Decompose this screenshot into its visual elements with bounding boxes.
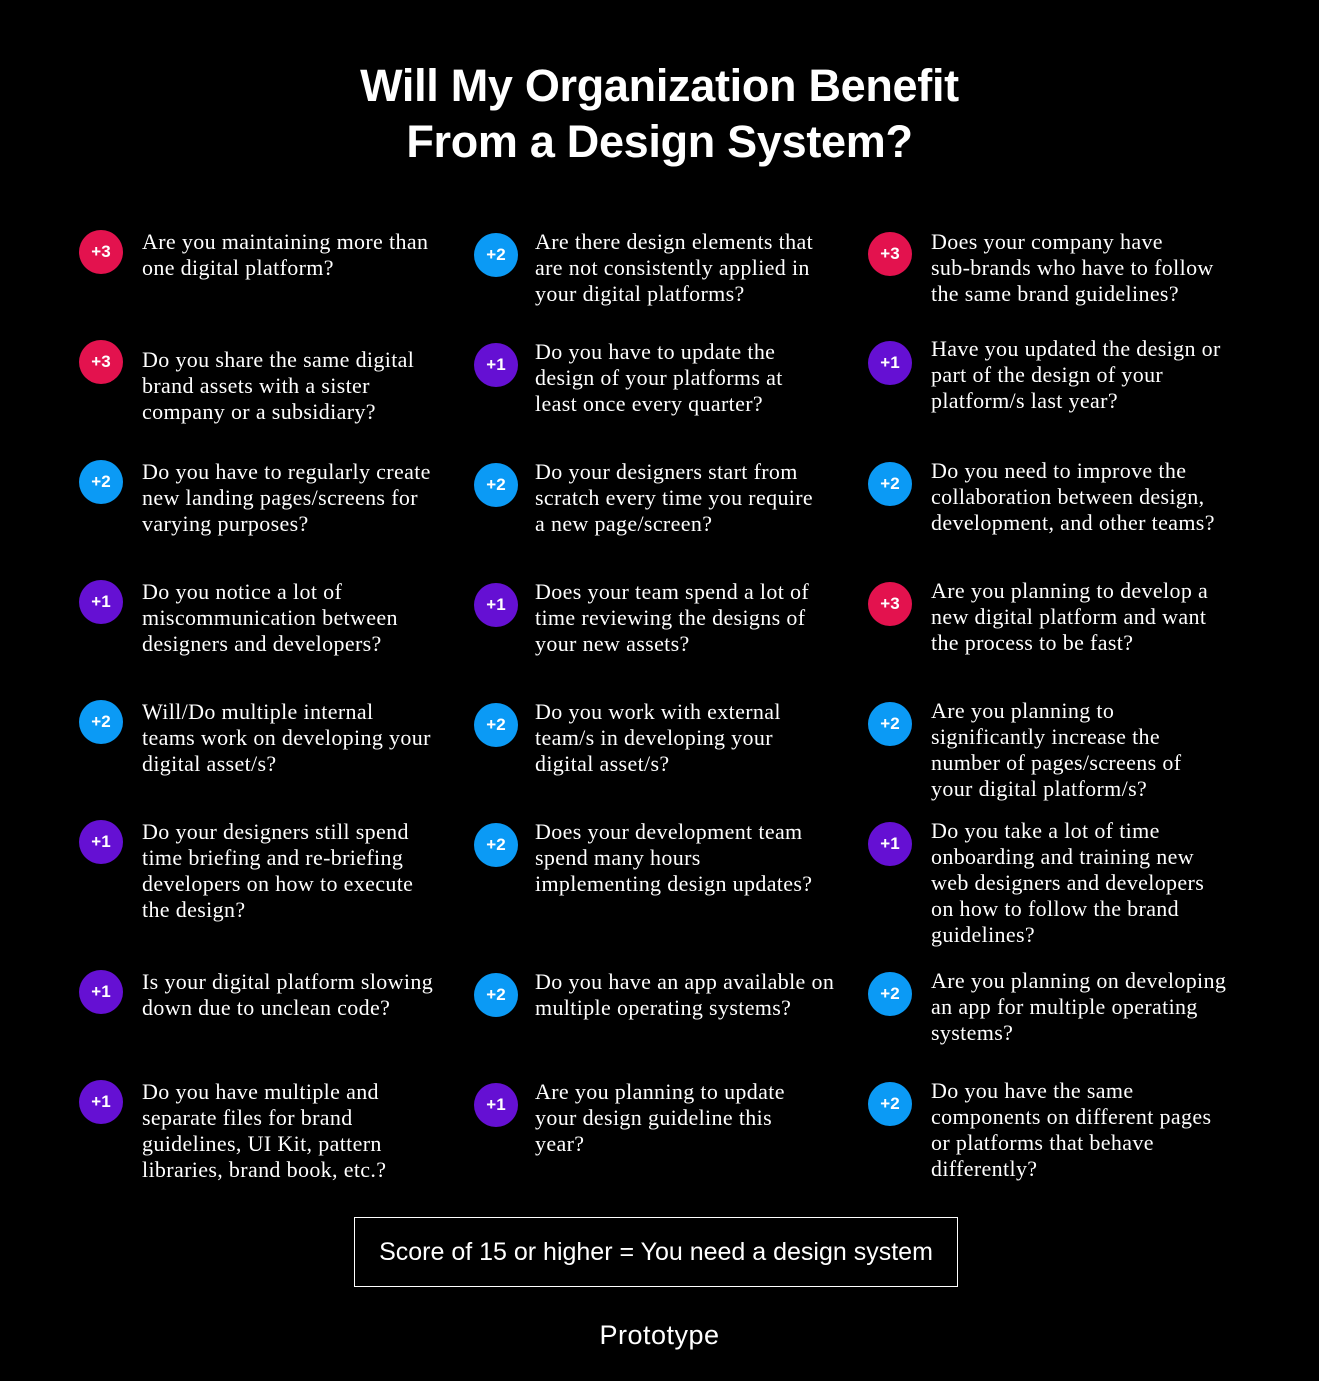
badge: [474, 583, 518, 627]
badge: [868, 822, 912, 866]
question: [931, 1078, 1211, 1182]
badge: [79, 1080, 123, 1124]
item: c3r5: [868, 702, 1248, 812]
question: brand assets with a sister: [142, 373, 370, 398]
question: [931, 578, 1208, 656]
score box: Score of 15 or higher = You need a design system: [379, 1238, 933, 1266]
question: spend many hours: [535, 845, 701, 870]
question: your design guideline this: [535, 1105, 772, 1130]
item: c3r1: [868, 229, 1214, 306]
question: a new page/screen?: [535, 511, 712, 536]
question: Do you share the same digital: [142, 347, 414, 372]
badge: +3: [880, 594, 900, 613]
question: number of pages/screens of: [931, 750, 1181, 775]
badge: [79, 460, 123, 504]
badge: [474, 343, 518, 387]
question: [535, 819, 812, 896]
title: [360, 60, 959, 167]
badge: [79, 700, 123, 744]
badge: +2: [486, 985, 506, 1004]
question: Do you notice a lot of: [142, 579, 342, 604]
item: c3r2: [868, 336, 1221, 413]
question: Does your company have: [931, 229, 1163, 254]
question: [535, 459, 813, 536]
question: new digital platform and want: [931, 604, 1206, 629]
item: c3r4: [868, 578, 1208, 655]
badge: [868, 462, 912, 506]
question: year?: [535, 1131, 584, 1156]
item: c2r5: [474, 699, 781, 776]
question: developers on how to execute: [142, 871, 413, 896]
question: [535, 339, 783, 416]
badge: +3: [880, 244, 900, 263]
badge: [79, 970, 123, 1014]
question: guidelines, UI Kit, pattern: [142, 1131, 382, 1156]
badge: +3: [91, 242, 111, 261]
badge: [474, 973, 518, 1017]
badge: +1: [880, 353, 900, 372]
badge: +1: [486, 595, 506, 614]
question: Are you planning to develop a: [931, 578, 1208, 603]
question: sub-brands who have to follow: [931, 255, 1214, 280]
question: Do you work with external: [535, 699, 781, 724]
badge: +2: [880, 984, 900, 1003]
question: varying purposes?: [142, 511, 309, 536]
question: [931, 229, 1214, 306]
badge: +2: [880, 474, 900, 493]
question: on how to follow the brand: [931, 896, 1179, 921]
question: Do your designers start from: [535, 459, 798, 484]
badge: +1: [486, 1095, 506, 1114]
question: are not consistently applied in: [535, 255, 810, 280]
question: least once every quarter?: [535, 391, 763, 416]
item: c2r6: [474, 819, 812, 896]
question: [931, 818, 1204, 948]
badge: [79, 820, 123, 864]
question: Do you have multiple and: [142, 1079, 379, 1104]
question: [535, 1079, 785, 1156]
badge: +1: [486, 355, 506, 374]
item: c1r8: [79, 1079, 386, 1182]
question: implementing design updates?: [535, 871, 812, 896]
question: onboarding and training new: [931, 844, 1194, 869]
score box: [354, 1217, 958, 1287]
question: designers and developers?: [142, 631, 382, 656]
question: Have you updated the design or: [931, 336, 1221, 361]
question: [931, 968, 1226, 1046]
question: [142, 459, 431, 536]
question: scratch every time you require: [535, 485, 813, 510]
badge: +2: [880, 1094, 900, 1113]
item: c3r6: [868, 822, 1248, 932]
item: c2r2: [474, 339, 783, 416]
badge: +2: [486, 715, 506, 734]
question: [535, 699, 781, 776]
item: c2r1: [474, 229, 813, 306]
question: digital asset/s?: [535, 751, 670, 776]
badge: [474, 823, 518, 867]
question: [931, 458, 1215, 535]
question: significantly increase the: [931, 724, 1160, 749]
badge: [868, 232, 912, 276]
question: digital asset/s?: [142, 751, 277, 776]
badge: [79, 580, 123, 624]
question: Do you have to regularly create: [142, 459, 431, 484]
question: time reviewing the designs of: [535, 605, 805, 630]
question: company or a subsidiary?: [142, 399, 376, 424]
question: [535, 579, 809, 656]
question: Will/Do multiple internal: [142, 699, 374, 724]
question: [142, 229, 428, 280]
question: your digital platform/s?: [931, 776, 1147, 801]
item: c1r4: [79, 579, 398, 656]
question: Do you have to update the: [535, 339, 775, 364]
question: or platforms that behave: [931, 1130, 1154, 1155]
badge: +2: [91, 472, 111, 491]
item: c2r3: [474, 459, 813, 536]
question: Do you need to improve the: [931, 458, 1186, 483]
question: guidelines?: [931, 922, 1035, 947]
item: c2r7: [474, 969, 834, 1020]
item: c3r8: [868, 1082, 1248, 1192]
question: [931, 698, 1181, 802]
item: c3r3: [868, 458, 1215, 535]
question: [142, 699, 431, 776]
badge: [474, 703, 518, 747]
badge: [474, 233, 518, 277]
question: Does your development team: [535, 819, 803, 844]
question: development, and other teams?: [931, 510, 1215, 535]
question: miscommunication between: [142, 605, 398, 630]
badge: [474, 463, 518, 507]
question: libraries, brand book, etc.?: [142, 1157, 386, 1182]
question: Are you planning on developing: [931, 968, 1226, 993]
question: down due to unclean code?: [142, 995, 390, 1020]
badge: +2: [486, 475, 506, 494]
question: one digital platform?: [142, 255, 334, 280]
question: part of the design of your: [931, 362, 1163, 387]
question: the design?: [142, 897, 245, 922]
item: c3r7: [868, 972, 1248, 1082]
badge: [79, 230, 123, 274]
item: c1r2: [79, 340, 414, 424]
badge: [79, 340, 123, 384]
badge: [868, 702, 912, 746]
badge: +1: [91, 592, 111, 611]
item: c1r6: [79, 819, 413, 922]
badge: +1: [880, 834, 900, 853]
item: c1r7: [79, 969, 433, 1020]
question: design of your platforms at: [535, 365, 783, 390]
item: c1r3: [79, 459, 431, 536]
badge: +3: [91, 352, 111, 371]
badge: +2: [880, 714, 900, 733]
question: Do you have an app available on: [535, 969, 834, 994]
question: new landing pages/screens for: [142, 485, 418, 510]
question: [142, 1079, 386, 1182]
badge: +2: [486, 245, 506, 264]
question: Do you take a lot of time: [931, 818, 1160, 843]
badge: +1: [91, 832, 111, 851]
item: c1r5: [79, 699, 431, 776]
question: Are you maintaining more than: [142, 229, 428, 254]
question: Are there design elements that: [535, 229, 813, 254]
badge: [868, 582, 912, 626]
badge: [868, 341, 912, 385]
question: the process to be fast?: [931, 630, 1133, 655]
question: Are you planning to update: [535, 1079, 785, 1104]
question: an app for multiple operating: [931, 994, 1198, 1019]
question: collaboration between design,: [931, 484, 1204, 509]
question: time briefing and re-briefing: [142, 845, 403, 870]
title: Will My Organization Benefit: [360, 60, 959, 111]
question: [535, 969, 834, 1020]
question: [535, 229, 813, 306]
title: From a Design System?: [406, 116, 913, 167]
question: the same brand guidelines?: [931, 281, 1179, 306]
question: teams work on developing your: [142, 725, 431, 750]
question: Do you have the same: [931, 1078, 1134, 1103]
question: multiple operating systems?: [535, 995, 791, 1020]
badge: [474, 1083, 518, 1127]
question: systems?: [931, 1020, 1013, 1045]
badge: [868, 1082, 912, 1126]
badge: [868, 972, 912, 1016]
item: c2r8: [474, 1079, 785, 1156]
question: differently?: [931, 1156, 1037, 1181]
question: [142, 819, 413, 922]
badge: +2: [91, 712, 111, 731]
question: your digital platforms?: [535, 281, 745, 306]
item: c1r1: [79, 229, 428, 280]
badge: +2: [486, 835, 506, 854]
question: team/s in developing your: [535, 725, 773, 750]
question: Are you planning to: [931, 698, 1114, 723]
question: Do your designers still spend: [142, 819, 409, 844]
badge: +1: [91, 1092, 111, 1111]
item: c2r4: [474, 579, 809, 656]
question: [931, 336, 1221, 413]
question: your new assets?: [535, 631, 690, 656]
question: platform/s last year?: [931, 388, 1118, 413]
question: [142, 969, 433, 1020]
logo: Prototype: Prototype: [599, 1320, 720, 1350]
question: Does your team spend a lot of: [535, 579, 809, 604]
question: components on different pages: [931, 1104, 1211, 1129]
question: [142, 579, 398, 656]
question: web designers and developers: [931, 870, 1204, 895]
badge: +1: [91, 982, 111, 1001]
question: [142, 347, 414, 424]
question: separate files for brand: [142, 1105, 353, 1130]
question: Is your digital platform slowing: [142, 969, 433, 994]
